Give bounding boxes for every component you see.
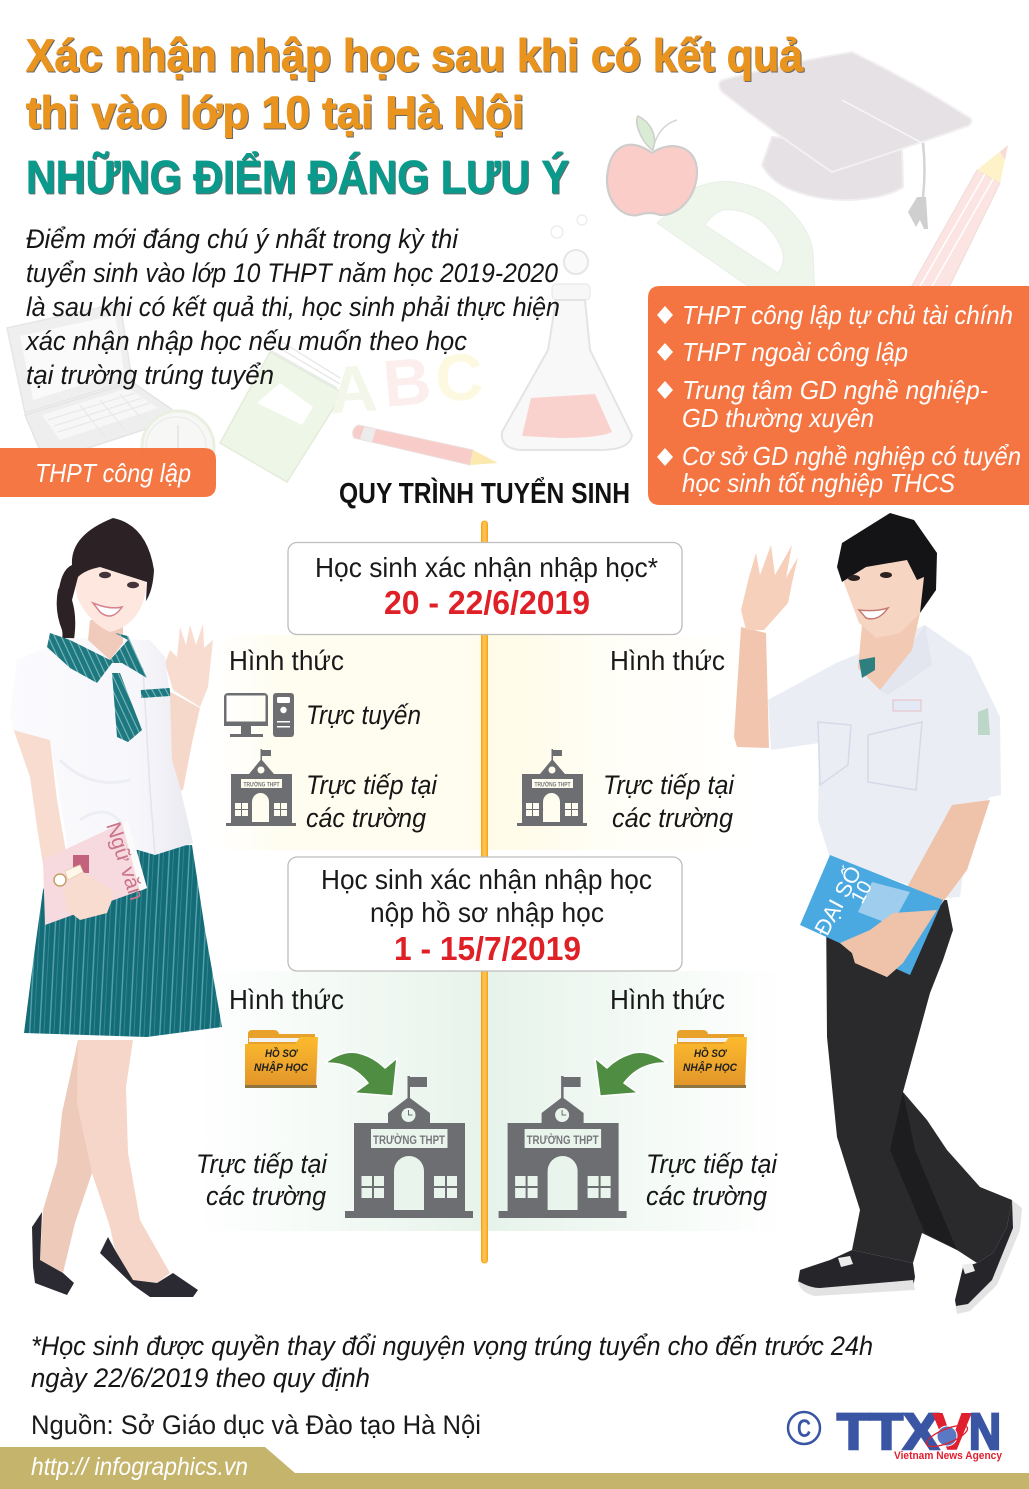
raised arm bbox=[734, 627, 769, 748]
text: in person at schools, upper right: Trực tiếp tại bbox=[603, 770, 735, 800]
source line: Nguồn: Sở Giáo dục và Đào tạo Hà Nội bbox=[31, 1410, 481, 1440]
icon: folder left: HỒ SƠ bbox=[265, 1047, 299, 1060]
icon: pencil bbox=[905, 145, 1008, 312]
icon: folder left bbox=[245, 1030, 318, 1088]
background clip-art: school objects bbox=[7, 52, 1008, 483]
heading: admission process: QUY TRÌNH TUYỂN SINH bbox=[339, 476, 630, 510]
neck bbox=[88, 620, 123, 660]
left shoe bbox=[798, 1250, 915, 1296]
eyes and smile bbox=[93, 572, 139, 616]
figure: schoolboy bbox=[734, 513, 1022, 1314]
title: thi vào lớp 10 tại Hà Nội bbox=[26, 87, 524, 138]
arrow: folder to school left bbox=[325, 1052, 397, 1096]
text: in person at schools, upper right bbox=[603, 770, 735, 833]
bullet list bbox=[657, 300, 1021, 498]
footnote: ngày 22/6/2019 theo quy định bbox=[31, 1363, 370, 1393]
label: public high school: THPT công lập bbox=[35, 458, 191, 488]
skirt bbox=[24, 845, 222, 1037]
logo: TTXVN: TTX bbox=[837, 1403, 939, 1460]
icon: large school left: TRƯỜNG THPT bbox=[373, 1132, 446, 1147]
icon: large school right: TRƯỜNG THPT bbox=[527, 1132, 599, 1147]
label: public high school bbox=[0, 448, 216, 497]
timeline line bbox=[482, 521, 488, 1263]
labels: form of submission, lower bbox=[229, 984, 725, 1015]
hair bbox=[58, 518, 154, 601]
icon: graduation cap bbox=[719, 52, 972, 229]
face bbox=[844, 555, 927, 638]
title: Xác nhận nhập học sau khi có kết quả bbox=[26, 30, 804, 81]
figure: schoolgirl bbox=[10, 518, 222, 1297]
icon: large school right bbox=[499, 1076, 627, 1218]
intro paragraph: tuyển sinh vào lớp 10 THPT năm học 2019-2020 bbox=[26, 258, 558, 288]
text: in person at schools, lower left: các trường bbox=[206, 1181, 326, 1211]
footnote bbox=[31, 1331, 873, 1393]
copyright symbol bbox=[788, 1412, 820, 1444]
neck and collar bbox=[858, 613, 920, 690]
icon: laptop bbox=[7, 303, 183, 462]
text: in person at schools, upper left: các trường bbox=[306, 803, 426, 833]
logo: TTXVN: V bbox=[933, 1403, 971, 1460]
panel: green background bbox=[195, 971, 785, 1231]
bullet list: THPT ngoài công lập bbox=[682, 337, 908, 367]
collar bbox=[47, 633, 147, 683]
raised arm bbox=[167, 690, 200, 792]
step box 1: Học sinh xác nhận nhập học* bbox=[315, 552, 658, 583]
intro paragraph: xác nhận nhập học nếu muốn theo học bbox=[24, 326, 467, 356]
front leg bbox=[77, 1040, 170, 1283]
book: Đại số 10: ĐẠI SỐ bbox=[808, 861, 866, 939]
website url: http:// infographics.vn bbox=[31, 1453, 248, 1481]
logo: TTXVN bbox=[837, 1403, 1003, 1462]
icon: apple bbox=[607, 116, 697, 215]
hair bbox=[837, 513, 937, 613]
title bbox=[26, 30, 804, 138]
face bbox=[74, 548, 146, 632]
intro paragraph bbox=[24, 224, 560, 390]
text: in person at schools, lower right: các trường bbox=[646, 1181, 767, 1211]
back leg bbox=[40, 1040, 92, 1273]
step box 1 bbox=[288, 542, 682, 634]
text: in person at schools, upper left: Trực tiếp tại bbox=[306, 770, 438, 800]
panel: yellow background bbox=[215, 635, 760, 850]
labels: form of submission, upper: Hình thức bbox=[610, 645, 725, 676]
hand and watch bbox=[54, 865, 115, 920]
step box 2 bbox=[288, 857, 682, 971]
step box 2: 1 - 15/7/2019 bbox=[394, 930, 581, 967]
icon: flask with bubbles bbox=[502, 215, 632, 450]
text: in person at schools, upper left bbox=[306, 770, 438, 833]
text: in person at schools, lower left: Trực tiếp tại bbox=[196, 1149, 328, 1179]
intro paragraph: Điểm mới đáng chú ý nhất trong kỳ thi bbox=[26, 224, 459, 254]
shirt bbox=[10, 638, 193, 855]
labels: form of submission, upper bbox=[229, 645, 725, 676]
labels: form of submission, upper: Hình thức bbox=[229, 645, 344, 676]
eyes and smile bbox=[848, 572, 892, 619]
lowered arm bbox=[840, 800, 990, 977]
icon: small school right bbox=[517, 749, 587, 826]
step box 1: 20 - 22/6/2019 bbox=[384, 584, 590, 621]
logo: TTXVN: N bbox=[969, 1403, 1001, 1460]
icon: protractor bbox=[657, 182, 815, 305]
back braid bbox=[50, 570, 78, 680]
letters ABC: C bbox=[433, 339, 485, 415]
icon: small school left bbox=[226, 749, 296, 826]
step box 2: nộp hồ sơ nhập học bbox=[370, 897, 604, 928]
subtitle: NHỮNG ĐIỂM ĐÁNG LƯU Ý bbox=[26, 151, 569, 203]
left arm bbox=[12, 725, 68, 880]
book: Đại số 10 bbox=[800, 855, 943, 975]
book: Đại số 10: 10 bbox=[847, 877, 877, 907]
shirt bbox=[768, 625, 1001, 898]
icon: clock bbox=[142, 411, 214, 483]
text: in person at schools, lower right: Trực tiếp tại bbox=[646, 1149, 778, 1179]
necktie bbox=[112, 673, 142, 742]
bullet list: học sinh tốt nghiệp THCS bbox=[682, 468, 956, 498]
panel: other school types bbox=[648, 286, 1029, 505]
letters ABC: A bbox=[327, 350, 379, 427]
text: in person at schools, lower right bbox=[646, 1149, 778, 1211]
icon: folder right: NHẬP HỌC bbox=[683, 1061, 738, 1074]
copyright symbol: C bbox=[797, 1415, 811, 1443]
shoes bbox=[32, 1212, 74, 1295]
book: Ngữ văn bbox=[43, 819, 148, 925]
logo: TTXVN: Vietnam News Agency bbox=[894, 1450, 1003, 1462]
right shoe bbox=[955, 1200, 1022, 1314]
icon: folder left: NHẬP HỌC bbox=[254, 1061, 309, 1074]
icon: book bbox=[220, 342, 343, 482]
text: in person at schools, upper right: các trường bbox=[612, 803, 733, 833]
step box 2: Học sinh xác nhận nhập học bbox=[321, 864, 652, 895]
labels: form of submission, lower: Hình thức bbox=[610, 984, 725, 1015]
arrow: folder to school right bbox=[595, 1052, 667, 1096]
icon: small school right: TRƯỜNG THPT bbox=[534, 780, 571, 788]
trousers bbox=[826, 900, 1012, 1263]
letters ABC bbox=[327, 339, 485, 427]
text: online: Trực tuyến bbox=[306, 700, 421, 730]
footer bar bbox=[0, 1447, 1029, 1489]
icon: small school left: TRƯỜNG THPT bbox=[244, 780, 280, 788]
icon: large school left bbox=[345, 1076, 473, 1218]
intro paragraph: tại trường trúng tuyển bbox=[26, 360, 274, 390]
footnote: *Học sinh được quyền thay đổi nguyện vọng trúng tuyển cho đến trước 24h bbox=[31, 1331, 873, 1361]
bullet list: GD thường xuyên bbox=[682, 403, 874, 433]
hand over book bbox=[840, 910, 937, 977]
icon: small pencil bbox=[353, 425, 498, 465]
book: Ngữ văn: Ngữ văn bbox=[101, 819, 148, 903]
icon: desktop computer bbox=[224, 693, 294, 737]
icon: folder right bbox=[674, 1030, 747, 1088]
icon: folder right: HỒ SƠ bbox=[694, 1047, 728, 1060]
intro paragraph: là sau khi có kết quả thi, học sinh phải thực hiện bbox=[26, 292, 560, 322]
letters ABC: B bbox=[380, 343, 434, 421]
pocket strip bbox=[141, 688, 170, 698]
bullet list: Trung tâm GD nghề nghiệp- bbox=[682, 375, 988, 405]
labels: form of submission, lower: Hình thức bbox=[229, 984, 344, 1015]
text: in person at schools, lower left bbox=[196, 1149, 328, 1211]
